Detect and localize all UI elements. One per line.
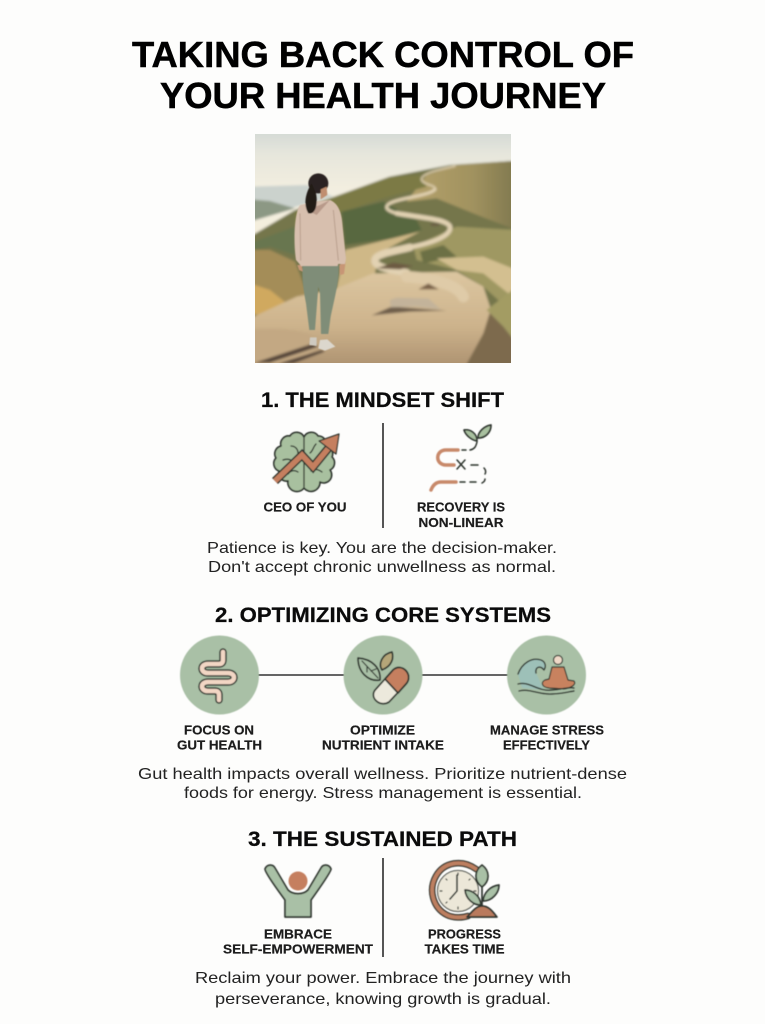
text: mindset summary [207, 540, 557, 576]
label: recovery is non-linear: RECOVERY IS [417, 500, 505, 514]
label: focus on gut health: FOCUS ON [184, 722, 254, 738]
label: focus on gut health [177, 722, 262, 752]
label: manage stress effectively: MANAGE STRESS [490, 722, 604, 738]
text: sustained path summary: perseverance, knowing growth is gradual. [215, 991, 551, 1008]
icon: brain with rising arrow [274, 432, 339, 492]
divider [382, 423, 384, 528]
divider [382, 858, 384, 957]
section heading: optimizing core systems: 2. OPTIMIZING CORE SYSTEMS [215, 603, 551, 627]
label: recovery is non-linear [417, 500, 505, 530]
title: YOUR HEALTH JOURNEY [160, 75, 606, 116]
label: focus on gut health: GUT HEALTH [177, 738, 262, 752]
text: mindset summary: Don't accept chronic unwellness as normal. [208, 559, 556, 576]
label: manage stress effectively [490, 722, 604, 752]
label: CEO of you: CEO OF YOU [264, 500, 346, 514]
connector line [258, 674, 508, 676]
text: sustained path summary [195, 970, 571, 1008]
text: core systems summary: Gut health impacts overall wellness. Prioritize nutrient-dense [138, 766, 627, 783]
icon: gut health [180, 636, 259, 714]
label: optimize nutrient intake [322, 722, 444, 752]
label: progress takes time: PROGRESS [428, 926, 501, 942]
icon: leaf, seed and capsule [344, 636, 422, 714]
label: progress takes time: TAKES TIME [424, 942, 505, 956]
section heading: the mindset shift: 1. THE MINDSET SHIFT [261, 388, 504, 412]
text: core systems summary [138, 766, 627, 802]
icon: clock with growing plant [432, 863, 499, 917]
label: manage stress effectively: EFFECTIVELY [503, 738, 590, 752]
photo: woman looking along a winding trail [250, 130, 517, 370]
label: progress takes time [424, 926, 505, 956]
label: embrace self-empowerment: EMBRACE [264, 926, 332, 942]
title [132, 34, 634, 116]
text: core systems summary: foods for energy. Stress management is essential. [184, 785, 582, 802]
label: optimize nutrient intake: OPTIMIZE [350, 722, 415, 738]
title: TAKING BACK CONTROL OF [132, 34, 634, 75]
section heading: the sustained path: 3. THE SUSTAINED PATH [248, 827, 517, 851]
icon: meditating figure on waves [507, 636, 586, 714]
label: recovery is non-linear: NON-LINEAR [418, 515, 504, 530]
text: mindset summary: Patience is key. You are the decision-maker. [207, 540, 557, 557]
label: optimize nutrient intake: NUTRIENT INTAKE [322, 738, 444, 752]
icon: non-linear recovery path with sprout [431, 425, 491, 490]
icon: person with raised arms [265, 865, 331, 917]
text: sustained path summary: Reclaim your power. Embrace the journey with [195, 970, 571, 987]
label: embrace self-empowerment: SELF-EMPOWERMENT [223, 942, 373, 956]
label: embrace self-empowerment [223, 926, 373, 956]
